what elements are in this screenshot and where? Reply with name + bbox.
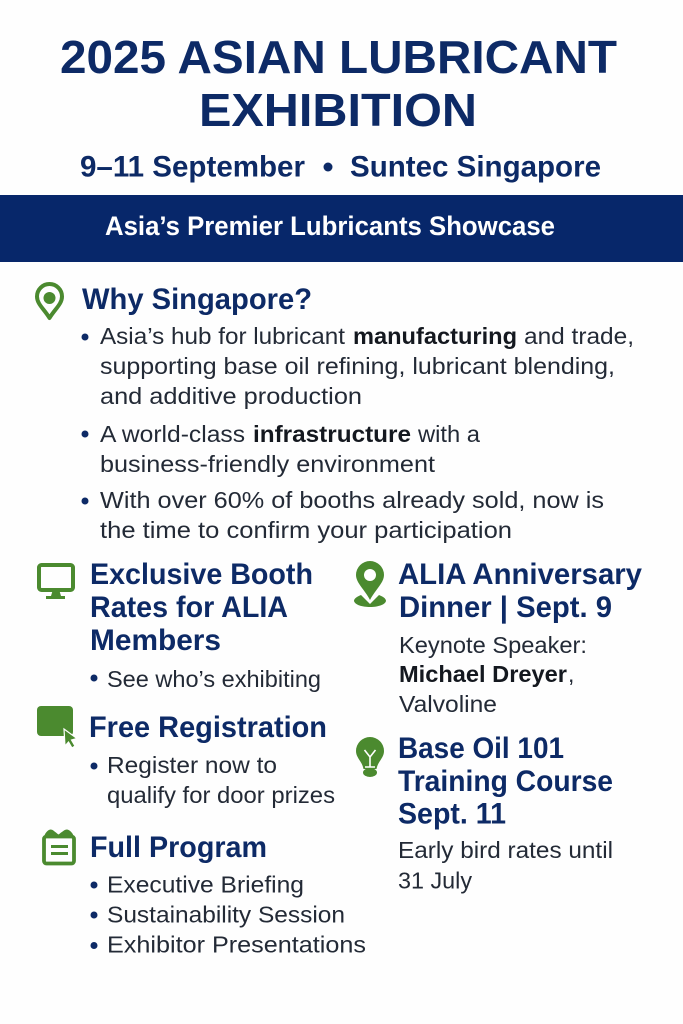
bullet: manufacturing hub: and trade, (524, 323, 634, 349)
title: 2025 ASIAN LUBRICANT (60, 31, 617, 83)
bullet: manufacturing hub: supporting base oil refining, lubricant blending, (100, 353, 615, 379)
panel: exclusive booth rates (39, 558, 321, 692)
text: keynote speaker: , (568, 661, 574, 687)
bullet: register now: Register now to (107, 752, 277, 778)
bullet: booths sold (82, 487, 604, 543)
icon: location pin outline (37, 284, 62, 318)
heading: exclusive booth rates: Exclusive Booth (90, 558, 313, 591)
heading: exclusive booth rates (90, 558, 313, 657)
heading: base oil training: Training Course (398, 765, 613, 798)
heading: anniversary dinner: ALIA Anniversary (398, 558, 643, 591)
list: program items: Executive Briefing (107, 872, 304, 898)
icon: notepad (44, 830, 74, 864)
bullet: infrastructure: business-friendly environment (100, 451, 436, 477)
bullet: manufacturing hub (82, 323, 634, 409)
bullet: manufacturing hub: manufacturing (353, 323, 517, 349)
heading: full program: Full Program (90, 831, 267, 864)
heading: anniversary dinner (398, 558, 643, 624)
panel: free registration (37, 706, 335, 808)
list: program items (90, 872, 366, 958)
heading: anniversary dinner: Dinner | Sept. 9 (399, 591, 612, 624)
subtitle: date and venue: Suntec Singapore (350, 150, 601, 184)
icon: screen with cursor (37, 706, 77, 748)
heading: base oil training: Base Oil 101 (398, 732, 564, 765)
panel: anniversary dinner (354, 558, 643, 717)
bullet: register now (90, 752, 335, 808)
panel: why Singapore (37, 283, 634, 543)
bullet: booths sold: With over 60% of booths already sold, now is (100, 487, 604, 513)
bullet: infrastructure: with a (417, 421, 480, 447)
icon: monitor (39, 565, 73, 599)
banner (0, 195, 683, 262)
text: keynote speaker: Valvoline (399, 691, 497, 717)
title: EXHIBITION (199, 84, 477, 136)
icon: map pin (354, 561, 386, 607)
bullet: manufacturing hub: Asia’s hub for lubricant (100, 323, 346, 349)
title (60, 31, 617, 136)
text: early bird rates (398, 837, 613, 894)
heading: why Singapore: Why Singapore? (82, 283, 312, 316)
bullet: infrastructure (82, 421, 480, 477)
subtitle: date and venue: 9–11 September (80, 150, 305, 184)
text: early bird rates: 31 July (398, 868, 473, 894)
list: program items: Sustainability Session (107, 902, 345, 928)
bullet: see who's exhibiting: See who’s exhibiting (107, 666, 321, 692)
text: keynote speaker (399, 632, 587, 717)
text: keynote speaker: Michael Dreyer (399, 661, 567, 687)
text: early bird rates: Early bird rates until (398, 837, 613, 863)
list: program items: Exhibitor Presentations (107, 932, 366, 958)
bullet: booths sold: the time to confirm your participation (100, 517, 512, 543)
panel: full program (44, 830, 366, 958)
heading: base oil training (398, 732, 613, 830)
text: keynote speaker: Keynote Speaker: (399, 632, 587, 658)
bullet: infrastructure: A world-class (100, 421, 245, 447)
bullet: manufacturing hub: and additive production (100, 383, 362, 409)
bullet: register now: qualify for door prizes (107, 782, 335, 808)
panel: base oil training (356, 732, 613, 894)
heading: exclusive booth rates: Members (90, 624, 221, 657)
subtitle: date and venue (80, 150, 601, 184)
banner: Asia’s Premier Lubricants Showcase (105, 211, 555, 241)
heading: free registration: Free Registration (89, 711, 327, 744)
heading: base oil training: Sept. 11 (398, 798, 506, 830)
bullet: infrastructure: infrastructure (253, 421, 411, 447)
heading: exclusive booth rates: Rates for ALIA (90, 591, 288, 624)
icon: light bulb (356, 737, 384, 777)
